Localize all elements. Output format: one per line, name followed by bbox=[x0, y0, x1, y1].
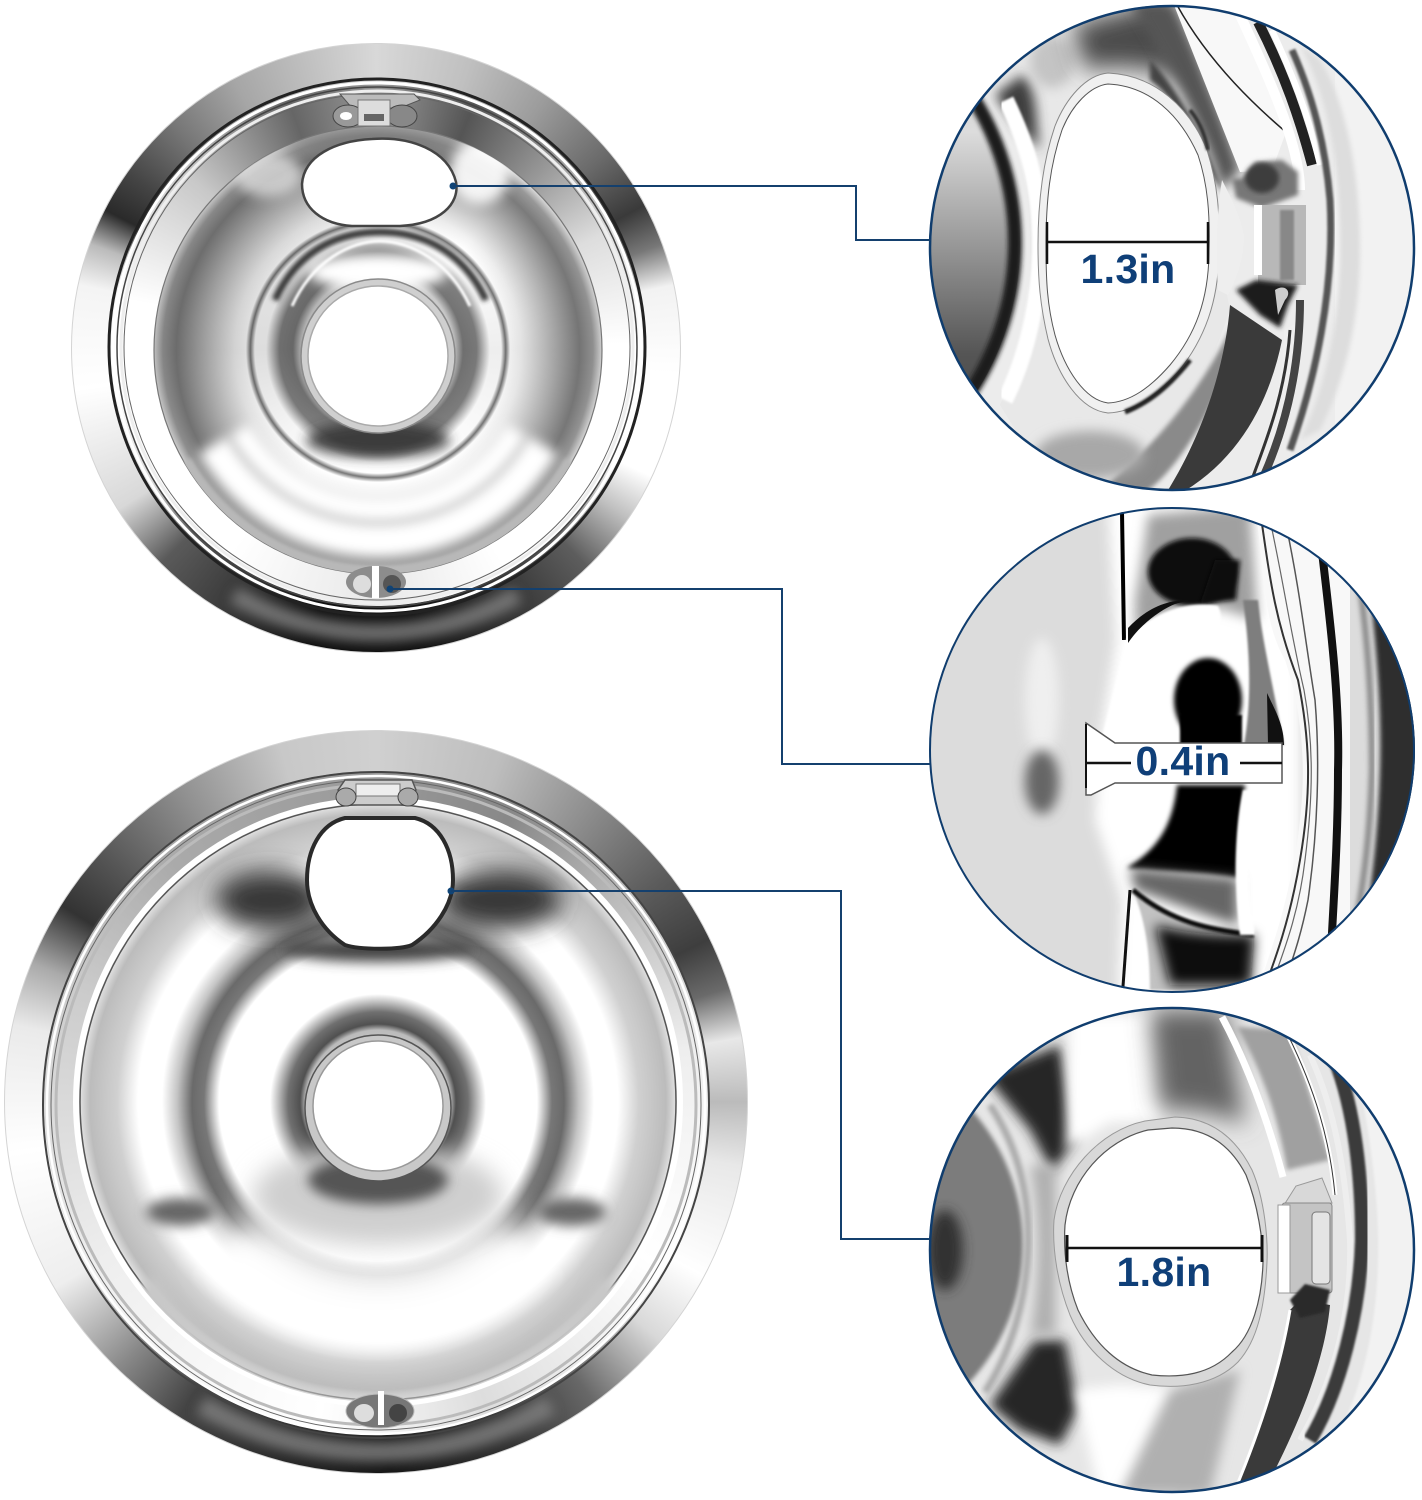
leader line: top pan vent to 1.3in detail bbox=[450, 182, 929, 241]
top tab of bottom pan bbox=[336, 780, 418, 806]
lower black bbox=[1127, 785, 1245, 878]
upper rim stripes bbox=[1240, 15, 1300, 190]
measure 1.8in: 1.8in bbox=[1117, 1249, 1211, 1295]
top drip pan (small, 6 inch) bbox=[71, 43, 681, 653]
disc on left bbox=[931, 1110, 1025, 1384]
notch bbox=[1086, 723, 1282, 795]
measure 1.3in bbox=[1047, 222, 1208, 292]
detail circle: 0.4in notch bbox=[929, 507, 1415, 993]
inner white shelf of top pan bbox=[115, 82, 639, 606]
bottom notch of bottom pan bbox=[346, 1391, 414, 1428]
top tab of top pan bbox=[333, 94, 420, 127]
detail circle: 1.3in vent hole bbox=[928, 4, 1416, 492]
tab bbox=[1232, 160, 1298, 208]
bottom notch of top pan bbox=[346, 566, 406, 598]
inner shelf of bottom pan bbox=[44, 771, 708, 1435]
outer rim of bottom pan bbox=[4, 730, 748, 1474]
oval vent hole of top pan bbox=[302, 139, 457, 226]
vent hole of bottom pan bbox=[307, 818, 453, 949]
leader line: bottom pan vent to 1.8in detail bbox=[448, 888, 929, 1240]
tab bbox=[1284, 1178, 1332, 1205]
mid black bbox=[1243, 600, 1284, 745]
outer rim of top pan bbox=[71, 43, 681, 653]
bowl of bottom pan bbox=[78, 802, 678, 1402]
vent hole bbox=[1054, 1117, 1267, 1386]
dimple bbox=[1025, 638, 1059, 762]
dark outer zone bbox=[1366, 611, 1415, 894]
center hole of top pan bbox=[301, 279, 455, 433]
leader line: top pan notch to 0.4in detail bbox=[386, 586, 930, 765]
measure 1.8in bbox=[1067, 1235, 1262, 1295]
measure 0.4in: 0.4in bbox=[1136, 738, 1230, 784]
bowl details of bottom pan bbox=[42, 771, 710, 1439]
disc on left bbox=[931, 112, 1020, 390]
bottom drip pan (large, 8 inch) bbox=[4, 730, 748, 1474]
lower dark band bbox=[1240, 1304, 1330, 1483]
center hole of bottom pan bbox=[305, 1035, 451, 1181]
bowl details of top pan bbox=[108, 78, 646, 616]
measure 1.3in: 1.3in bbox=[1081, 246, 1175, 292]
detail circle: 1.8in vent hole bbox=[928, 1006, 1416, 1494]
top blacks bbox=[1135, 505, 1258, 635]
vent hole bbox=[1038, 73, 1219, 413]
right rim bbox=[1299, 546, 1350, 954]
bowl of top pan bbox=[154, 126, 602, 574]
